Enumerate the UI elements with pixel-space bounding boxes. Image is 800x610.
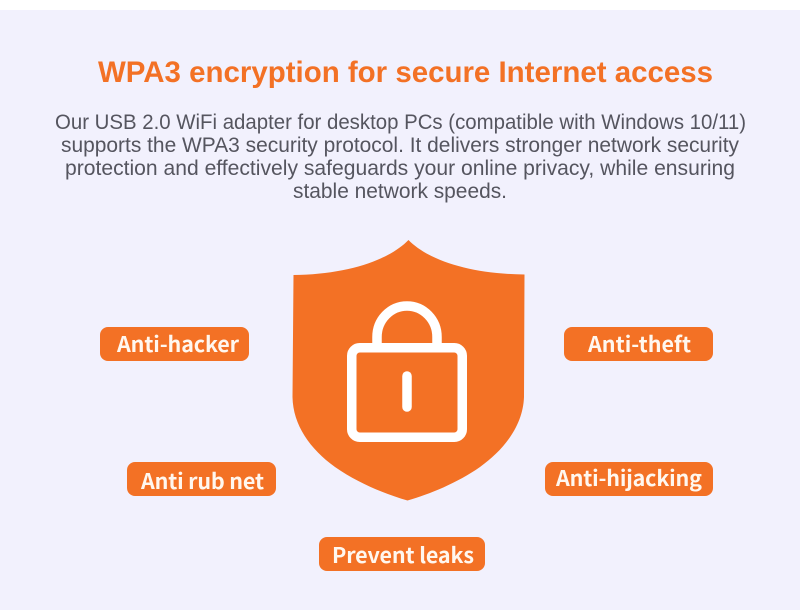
description text block: [55, 111, 746, 203]
label: Anti-theft: Anti-theft: [587, 328, 691, 359]
description text block: supports the WPA3 security protocol. It delivers stronger network security: [61, 134, 739, 157]
label: Prevent leaks: Prevent leaks: [332, 539, 474, 570]
label: Anti rub net: Anti rub net: [140, 465, 264, 496]
icon: shield with padlock: [292, 240, 524, 500]
title: WPA3 encryption for secure Internet access: [98, 56, 713, 89]
label: Anti-theft: [564, 327, 713, 361]
label: Anti-hijacking: Anti-hijacking: [555, 462, 702, 493]
description text block: protection and effectively safeguards your online privacy, while ensuring: [65, 157, 735, 180]
shield: [292, 240, 524, 500]
description text block: stable network speeds.: [293, 180, 507, 203]
padlock: [352, 306, 462, 437]
label: Anti-hacker: Anti-hacker: [116, 328, 240, 359]
description text block: Our USB 2.0 WiFi adapter for desktop PCs (compatible with Windows 10/11): [55, 111, 746, 134]
